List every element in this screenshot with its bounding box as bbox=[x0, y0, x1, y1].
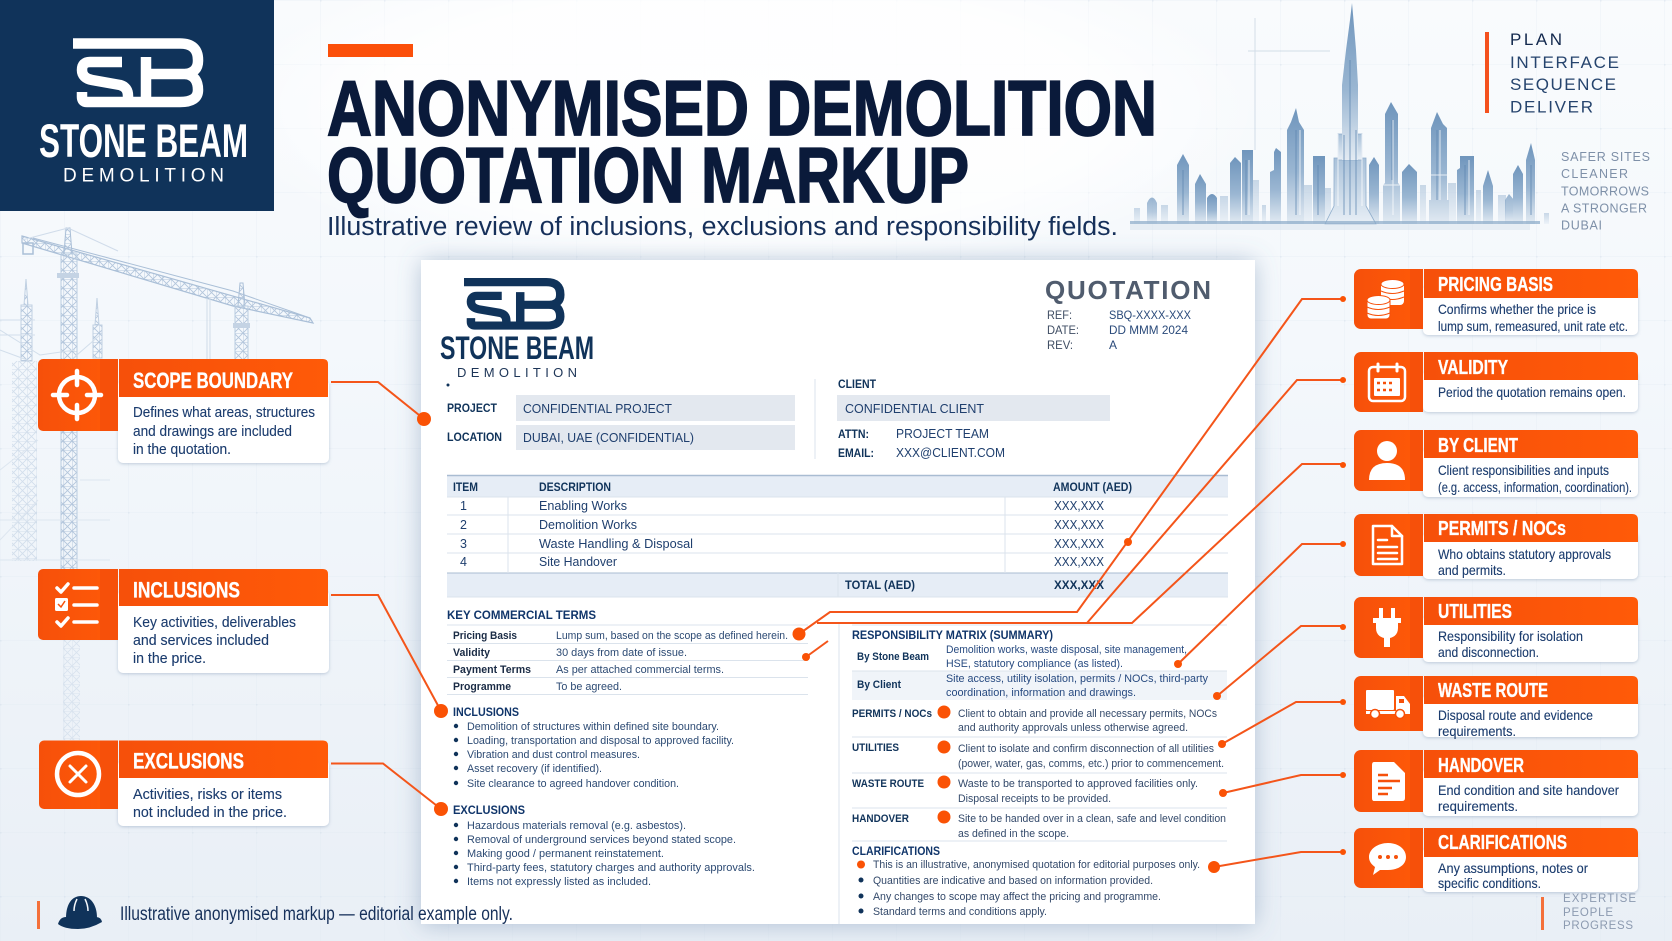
inclusions list: Loading, transportation and disposal to approved facility. bbox=[467, 735, 734, 747]
responsibility matrix: coordination, information and drawings. bbox=[946, 687, 1136, 699]
callout: permits / NOCs: Who obtains statutory approvals bbox=[1438, 546, 1611, 562]
quotation table: XXX,XXX bbox=[1054, 537, 1105, 551]
project fields bbox=[447, 395, 795, 450]
callout: waste route: requirements. bbox=[1438, 723, 1516, 739]
footer note: Illustrative anonymised markup — editorial example only. bbox=[120, 904, 513, 925]
responsibility matrix: as defined in the scope. bbox=[958, 828, 1069, 840]
client fields bbox=[837, 379, 1110, 460]
exclusions list: Making good / permanent reinstatement. bbox=[467, 848, 664, 860]
tagline: plan interface sequence deliver: SEQUENCE bbox=[1510, 75, 1616, 94]
quotation table: ITEM bbox=[453, 482, 478, 494]
quotation meta: DD MMM 2024 bbox=[1109, 323, 1188, 337]
quotation table: DESCRIPTION bbox=[539, 482, 611, 494]
icon: coins bbox=[1367, 280, 1404, 319]
client fields: EMAIL: bbox=[838, 448, 874, 460]
responsibility matrix: Site access, utility isolation, permits / NOCs, third-party bbox=[946, 673, 1208, 685]
callout: utilities: Responsibility for isolation bbox=[1438, 628, 1583, 644]
quotation table: AMOUNT (AED) bbox=[1053, 482, 1132, 494]
inclusions list: Demolition of structures within defined site boundary. bbox=[467, 721, 719, 733]
quotation table: TOTAL (AED) bbox=[845, 580, 915, 592]
quotation meta: DATE: bbox=[1047, 323, 1079, 337]
tagline: plan interface sequence deliver bbox=[1485, 30, 1619, 116]
responsibility matrix: Demolition works, waste disposal, site management, bbox=[946, 644, 1187, 656]
responsibility matrix: RESPONSIBILITY MATRIX (SUMMARY) bbox=[852, 628, 1053, 642]
responsibility matrix: HSE, statutory compliance (as listed). bbox=[946, 658, 1123, 670]
quotation table: Site Handover bbox=[539, 555, 617, 569]
inclusions list: INCLUSIONS bbox=[453, 705, 519, 719]
client fields: ATTN: bbox=[838, 429, 869, 441]
footer note bbox=[37, 896, 513, 929]
project fields: DUBAI, UAE (CONFIDENTIAL) bbox=[523, 431, 694, 445]
callout: pricing basis bbox=[1354, 269, 1638, 335]
tagline: safer sites: TOMORROWS bbox=[1561, 184, 1649, 198]
responsibility matrix: and authority approvals unless otherwise agreed. bbox=[958, 722, 1188, 734]
exclusions list: Hazardous materials removal (e.g. asbestos). bbox=[467, 820, 686, 832]
project fields: CONFIDENTIAL PROJECT bbox=[523, 402, 672, 416]
quotation table: XXX,XXX bbox=[1054, 499, 1105, 513]
clarifications list: Any changes to scope may affect the pricing and programme. bbox=[873, 891, 1161, 903]
callout: clarifications: CLARIFICATIONS bbox=[1438, 832, 1567, 854]
quotation table: XXX,XXX bbox=[1054, 580, 1104, 592]
key commercial terms: 30 days from date of issue. bbox=[556, 647, 687, 659]
tagline: expertise people progress: EXPERTISE bbox=[1563, 893, 1636, 905]
callout: exclusions bbox=[39, 740, 329, 826]
quotation meta: REV: bbox=[1047, 338, 1073, 352]
quotation table: 3 bbox=[460, 537, 467, 551]
callout: by client: BY CLIENT bbox=[1438, 435, 1518, 457]
callout: clarifications: specific conditions. bbox=[1438, 875, 1541, 891]
callout: scope boundary: and drawings are included bbox=[133, 423, 292, 440]
key commercial terms: Validity bbox=[453, 647, 491, 659]
clarifications list bbox=[852, 844, 1200, 918]
leader lines: right callouts bbox=[792, 296, 1346, 873]
tagline: expertise people progress bbox=[1541, 893, 1636, 932]
quotation meta bbox=[1047, 308, 1191, 352]
inclusions list bbox=[453, 705, 734, 790]
icon: speech bubble bbox=[1369, 843, 1406, 875]
quotation table: 1 bbox=[460, 499, 467, 513]
callout: inclusions: in the price. bbox=[133, 650, 206, 667]
exclusions list bbox=[453, 803, 755, 888]
responsibility matrix: (power, water, gas, comms, etc.) prior to commencement. bbox=[958, 758, 1224, 770]
callout: waste route bbox=[1354, 676, 1638, 739]
quotation table: Enabling Works bbox=[539, 499, 627, 513]
icon: handover document bbox=[1372, 762, 1405, 801]
client fields: XXX@CLIENT.COM bbox=[896, 446, 1005, 460]
clarifications list: This is an illustrative, anonymised quotation for editorial purposes only. bbox=[873, 859, 1200, 871]
icon: person bbox=[1369, 441, 1405, 480]
project fields: LOCATION bbox=[447, 432, 502, 444]
callout: scope boundary bbox=[38, 359, 329, 463]
quotation meta: REF: bbox=[1047, 308, 1072, 322]
callout: scope boundary: Defines what areas, structures bbox=[133, 404, 315, 421]
title: QUOTATION MARKUP bbox=[327, 131, 969, 219]
client fields: CLIENT bbox=[838, 379, 876, 391]
callout: permits / NOCs bbox=[1354, 514, 1638, 579]
exclusions list: Third-party fees, statutory charges and authority approvals. bbox=[467, 862, 755, 874]
crane illustration bbox=[0, 228, 313, 740]
tagline: plan interface sequence deliver: DELIVER bbox=[1510, 98, 1593, 116]
icon: plug bbox=[1373, 608, 1401, 647]
callout: waste route: WASTE ROUTE bbox=[1438, 680, 1548, 702]
tagline: safer sites: DUBAI bbox=[1561, 218, 1602, 232]
responsibility matrix: Site to be handed over in a clean, safe and level condition bbox=[958, 813, 1226, 825]
key commercial terms: Payment Terms bbox=[453, 664, 531, 676]
quotation table: Waste Handling & Disposal bbox=[539, 537, 693, 551]
responsibility matrix: Disposal receipts to be provided. bbox=[958, 793, 1111, 805]
logo subtitle: DEMOLITION bbox=[63, 166, 224, 186]
title: ANONYMISED DEMOLITION bbox=[327, 64, 1157, 152]
document logo: DEMOLITION bbox=[457, 365, 577, 380]
inclusions list: Asset recovery (if identified). bbox=[467, 763, 602, 775]
callout: utilities bbox=[1354, 597, 1638, 662]
exclusions list: Removal of underground services beyond stated scope. bbox=[467, 834, 736, 846]
logo mark bbox=[73, 44, 198, 102]
icon: crosshair bbox=[53, 371, 101, 419]
icon: checklist bbox=[55, 584, 97, 626]
callout: waste route: Disposal route and evidence bbox=[1438, 707, 1593, 723]
document logo: STONE BEAM bbox=[440, 330, 594, 366]
skyline illustration bbox=[1130, 3, 1549, 230]
callout: handover: End condition and site handover bbox=[1438, 782, 1619, 798]
callout: clarifications: Any assumptions, notes or bbox=[1438, 860, 1588, 876]
callout: clarifications bbox=[1354, 828, 1638, 892]
leader lines: left callouts bbox=[331, 382, 448, 816]
responsibility matrix: Waste to be transported to approved facilities only. bbox=[958, 778, 1198, 790]
client fields: PROJECT TEAM bbox=[896, 427, 989, 441]
project fields: PROJECT bbox=[447, 403, 497, 415]
key commercial terms bbox=[447, 608, 808, 694]
tagline: safer sites: A STRONGER bbox=[1561, 202, 1647, 216]
panel: quotation document bbox=[421, 260, 1255, 924]
key commercial terms: As per attached commercial terms. bbox=[556, 664, 724, 676]
tagline: plan interface sequence deliver: INTERFACE bbox=[1510, 53, 1619, 72]
callout: inclusions: INCLUSIONS bbox=[133, 578, 240, 602]
callout: inclusions: Key activities, deliverables bbox=[133, 614, 296, 631]
callout: scope boundary: in the quotation. bbox=[133, 441, 231, 458]
callout: pricing basis: lump sum, remeasured, unit rate etc. bbox=[1438, 318, 1628, 334]
clarifications list: Quantities are indicative and based on information provided. bbox=[873, 875, 1153, 887]
quotation table bbox=[447, 475, 1228, 597]
quotation table: 4 bbox=[460, 555, 467, 569]
title bbox=[327, 64, 1157, 219]
client fields: CONFIDENTIAL CLIENT bbox=[845, 402, 984, 416]
key commercial terms: Programme bbox=[453, 681, 511, 693]
logo panel bbox=[0, 0, 274, 211]
icon: calendar bbox=[1369, 364, 1405, 401]
quotation table: XXX,XXX bbox=[1054, 555, 1105, 569]
quotation table: XXX,XXX bbox=[1054, 518, 1105, 532]
key commercial terms: Lump sum, based on the scope as defined herein. bbox=[556, 630, 788, 642]
responsibility matrix: WASTE ROUTE bbox=[852, 778, 924, 790]
responsibility matrix bbox=[852, 625, 1227, 841]
tagline: safer sites bbox=[1561, 150, 1650, 232]
icon: cross in circle bbox=[57, 753, 99, 795]
quotation table: 2 bbox=[460, 518, 467, 532]
icon: document bbox=[1373, 526, 1402, 564]
tagline: expertise people progress: PROGRESS bbox=[1563, 920, 1633, 932]
callout: exclusions: not included in the price. bbox=[133, 804, 287, 821]
callout: inclusions bbox=[38, 569, 329, 673]
callout: handover: requirements. bbox=[1438, 798, 1518, 814]
callout: utilities: and disconnection. bbox=[1438, 644, 1539, 660]
tagline: expertise people progress: PEOPLE bbox=[1563, 907, 1613, 919]
logo wordmark: STONE BEAM bbox=[39, 114, 248, 167]
document logo bbox=[440, 282, 594, 386]
subtitle: Illustrative review of inclusions, exclusions and responsibility fields. bbox=[327, 213, 1118, 241]
callout: permits / NOCs: and permits. bbox=[1438, 562, 1506, 578]
exclusions list: EXCLUSIONS bbox=[453, 803, 525, 817]
responsibility matrix: By Client bbox=[857, 679, 901, 691]
quotation meta: SBQ-XXXX-XXX bbox=[1109, 308, 1191, 322]
key commercial terms: KEY COMMERCIAL TERMS bbox=[447, 608, 596, 622]
tagline: plan interface sequence deliver: PLAN bbox=[1510, 30, 1562, 49]
title accent bar bbox=[328, 44, 413, 57]
responsibility matrix: By Stone Beam bbox=[857, 651, 929, 663]
callout: exclusions: Activities, risks or items bbox=[133, 786, 282, 803]
callout: permits / NOCs: PERMITS / NOCs bbox=[1438, 518, 1566, 540]
clarifications list: Standard terms and conditions apply. bbox=[873, 906, 1047, 918]
callout: validity: VALIDITY bbox=[1438, 357, 1509, 379]
responsibility matrix: HANDOVER bbox=[852, 813, 909, 825]
inclusions list: Vibration and dust control measures. bbox=[467, 749, 640, 761]
callout: by client bbox=[1354, 430, 1638, 497]
callout: handover: HANDOVER bbox=[1438, 755, 1524, 777]
callout: validity bbox=[1354, 352, 1638, 412]
responsibility matrix: PERMITS / NOCs bbox=[852, 708, 932, 720]
callout: pricing basis: PRICING BASIS bbox=[1438, 274, 1553, 296]
callout: scope boundary: SCOPE BOUNDARY bbox=[133, 368, 293, 393]
responsibility matrix: Client to obtain and provide all necessary permits, NOCs bbox=[958, 708, 1217, 720]
key commercial terms: To be agreed. bbox=[556, 681, 622, 693]
quotation table: Demolition Works bbox=[539, 518, 637, 532]
responsibility matrix: Client to isolate and confirm disconnection of all utilities bbox=[958, 743, 1214, 755]
callout: validity: Period the quotation remains open. bbox=[1438, 384, 1626, 400]
callout: pricing basis: Confirms whether the price is bbox=[1438, 301, 1596, 317]
callout: handover bbox=[1354, 750, 1638, 816]
callout: by client: Client responsibilities and inputs bbox=[1438, 462, 1609, 478]
key commercial terms: Pricing Basis bbox=[453, 630, 517, 642]
responsibility matrix: UTILITIES bbox=[852, 742, 899, 754]
tagline: safer sites: CLEANER bbox=[1561, 167, 1628, 181]
icon: hard hat bbox=[58, 896, 102, 929]
callout: utilities: UTILITIES bbox=[1438, 601, 1512, 623]
quotation meta: A bbox=[1109, 338, 1117, 352]
clarifications list: CLARIFICATIONS bbox=[852, 844, 940, 858]
tagline: safer sites: SAFER SITES bbox=[1561, 150, 1650, 164]
quotation heading: QUOTATION bbox=[1045, 275, 1211, 305]
icon: truck bbox=[1366, 690, 1410, 718]
inclusions list: Site clearance to agreed handover condition. bbox=[467, 778, 679, 790]
callout: exclusions: EXCLUSIONS bbox=[133, 748, 244, 774]
callout: inclusions: and services included bbox=[133, 632, 269, 649]
exclusions list: Items not expressly listed as included. bbox=[467, 876, 651, 888]
